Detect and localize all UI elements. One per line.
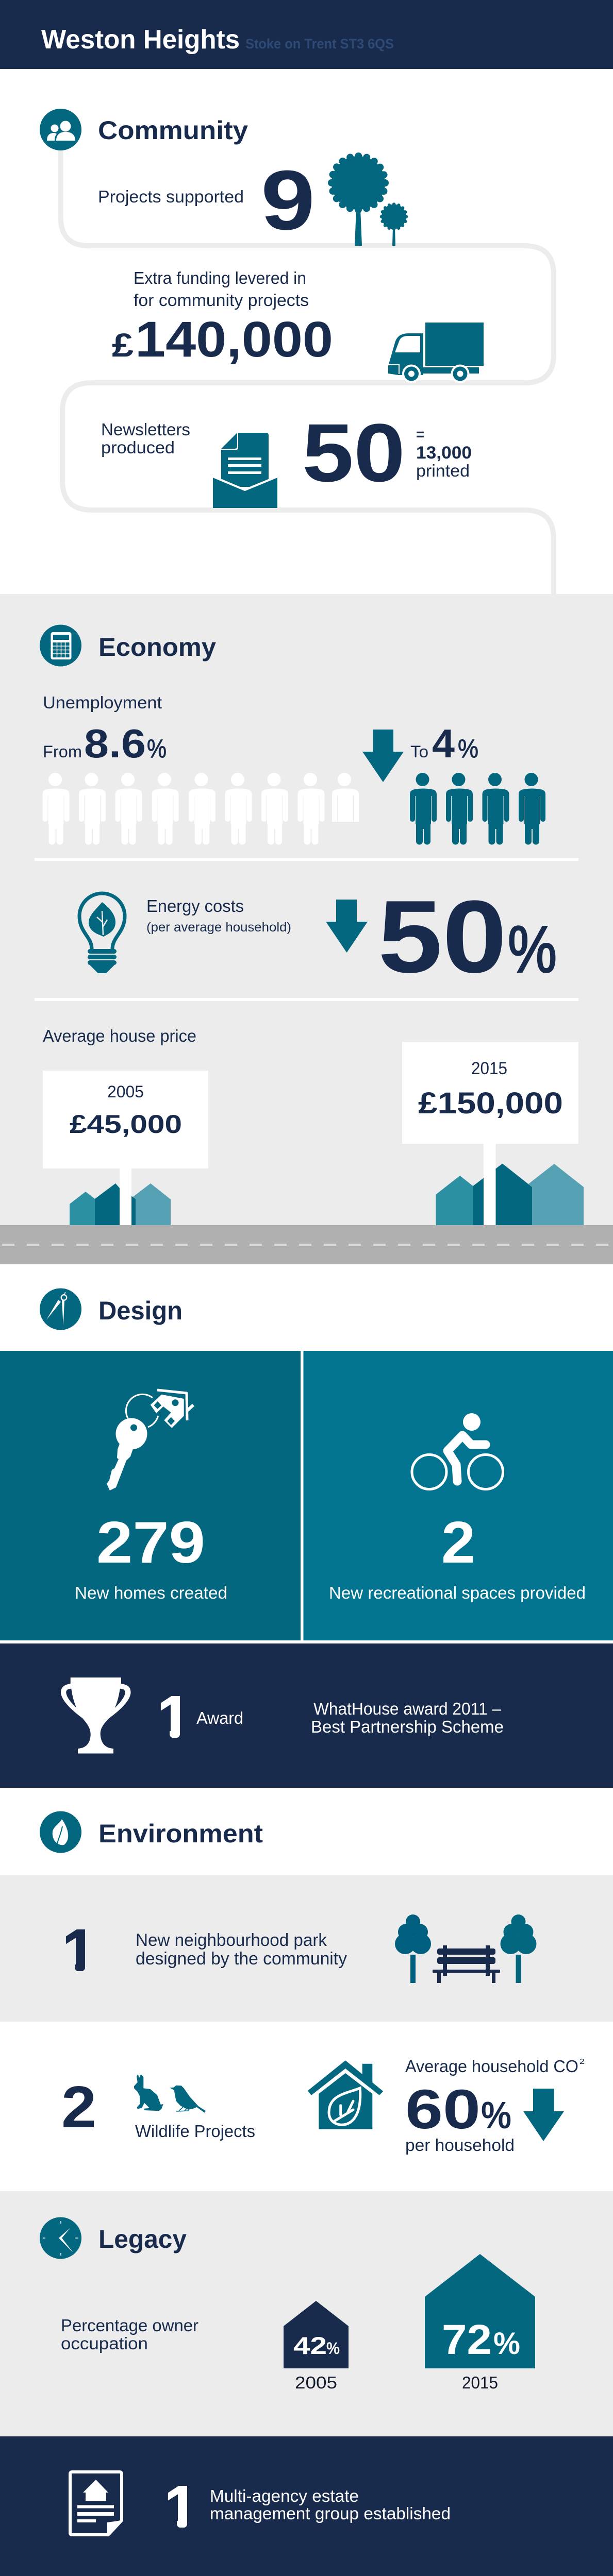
text: new neighbourhood park: designed by the community bbox=[136, 1949, 347, 1969]
text: percentage owner occupation bbox=[61, 2316, 198, 2353]
teal people: 4 bbox=[410, 773, 545, 845]
text: projects supported: Projects supported bbox=[98, 187, 244, 206]
stat: to 4%: To bbox=[410, 742, 428, 761]
year: 2005 bbox=[107, 1082, 144, 1101]
arrow: co2 down bbox=[523, 2089, 564, 2141]
sign: 2015 bbox=[402, 1042, 578, 1225]
text: unemployment: Unemployment bbox=[43, 693, 162, 712]
text: multi-agency group bbox=[210, 2486, 451, 2523]
white people: 8.6 bbox=[42, 773, 359, 845]
text: newsletters: produced bbox=[101, 438, 175, 457]
price: £45,000 bbox=[70, 1110, 182, 1139]
heading: legacy: Legacy bbox=[98, 2225, 187, 2253]
text: multi-agency group: Multi-agency estate bbox=[210, 2486, 359, 2505]
text: extra funding bbox=[134, 268, 309, 310]
text: extra funding: Extra funding levered in bbox=[134, 268, 306, 287]
number: 2: 2 bbox=[61, 2075, 96, 2140]
number: 1: 1 bbox=[62, 1917, 96, 1984]
stat: from 8.6%: 8.6 bbox=[84, 721, 146, 766]
icon: people bbox=[40, 109, 81, 150]
number: 1: 1 bbox=[164, 2473, 198, 2540]
icon: trees bbox=[332, 156, 406, 246]
text: extra funding: for community projects bbox=[134, 291, 309, 310]
arrow: unemployment down bbox=[362, 730, 404, 782]
text: percentage owner occupation: Percentage owner bbox=[61, 2316, 198, 2335]
text: 13,000 printed: printed bbox=[416, 461, 470, 480]
panel: legacy bbox=[0, 2191, 613, 2436]
text: award: Award bbox=[196, 1708, 243, 1727]
icon: right tree bbox=[500, 1914, 536, 1983]
icon: bird bbox=[170, 2086, 206, 2113]
text: newsletters: Newsletters bbox=[101, 420, 190, 439]
stat: 50% bbox=[378, 879, 557, 994]
stat: from 8.6%: % bbox=[147, 734, 167, 763]
stat: 60%: % bbox=[481, 2094, 511, 2137]
heading: environment: Environment bbox=[98, 1819, 263, 1848]
panel: recreational spaces bbox=[303, 1351, 613, 1640]
stat: 60%: 60 bbox=[405, 2078, 481, 2140]
address: Stoke on Trent ST3 6QS bbox=[245, 36, 394, 52]
number: 1: 1 bbox=[157, 1684, 191, 1751]
icon: light bulb bbox=[79, 893, 125, 973]
stat: from 8.6%: From bbox=[43, 742, 82, 761]
text: average house price: Average house price bbox=[43, 1026, 196, 1045]
houses: 2015 bbox=[436, 1163, 584, 1225]
icon: bench bbox=[433, 1945, 500, 1983]
text: new neighbourhood park bbox=[136, 1930, 347, 1969]
number: 279: 279 bbox=[96, 1510, 205, 1575]
icon: left tree bbox=[395, 1914, 431, 1983]
panel: economy bbox=[0, 594, 613, 1264]
panel: award bbox=[0, 1643, 613, 1788]
label: 2005: 2005 bbox=[295, 2373, 337, 2392]
text: energy costs: Energy costs bbox=[146, 896, 244, 916]
number: 140,000: 140,000 bbox=[135, 311, 333, 367]
panel: new homes bbox=[0, 1351, 301, 1640]
panel: estate management bbox=[0, 2436, 613, 2576]
icon: calculator bbox=[40, 624, 81, 667]
text: per household: per household bbox=[405, 2136, 515, 2155]
icon: eco house bbox=[308, 2060, 383, 2129]
heading: economy: Economy bbox=[98, 633, 216, 662]
number: 140,000: £ bbox=[112, 327, 134, 364]
year: 2015 bbox=[471, 1059, 507, 1078]
stat: 50%: % bbox=[508, 913, 557, 987]
heading: design: Design bbox=[98, 1296, 183, 1325]
text: new neighbourhood park: New neighbourhood park bbox=[136, 1930, 327, 1950]
text: 13,000 printed: = bbox=[416, 426, 424, 443]
icon: key and house bbox=[107, 1390, 193, 1490]
panel: environment bbox=[0, 1811, 613, 2155]
icon: compass bbox=[40, 1288, 81, 1330]
icon: truck bbox=[388, 323, 484, 383]
icon: newsletter envelope bbox=[213, 433, 277, 508]
text: new recreational spaces: New recreational spaces provided bbox=[329, 1583, 586, 1602]
house: 72% 2015: % bbox=[493, 2326, 520, 2361]
text: average household co2: 2 bbox=[579, 2057, 585, 2066]
house: 42% 2005: % bbox=[326, 2339, 340, 2358]
house: 42% 2005: 42 bbox=[293, 2332, 327, 2359]
title: Weston Heights bbox=[41, 25, 240, 55]
icon: cyclist bbox=[412, 1413, 503, 1489]
text: percentage owner occupation: occupation bbox=[61, 2334, 148, 2353]
text: 13,000 printed: 13,000 bbox=[416, 443, 472, 463]
road bbox=[0, 1225, 613, 1264]
stat: to 4%: 4 bbox=[432, 721, 455, 766]
heading: community: Community bbox=[98, 116, 248, 145]
text: whathouse award: Best Partnership Scheme bbox=[311, 1717, 504, 1736]
winding path bbox=[61, 149, 554, 598]
number: 50: 50 bbox=[302, 406, 405, 499]
text: whathouse award: WhatHouse award 2011 – bbox=[313, 1699, 502, 1718]
icon: clock bbox=[40, 2217, 81, 2259]
text: energy costs bbox=[146, 896, 291, 935]
panel: design bbox=[0, 1288, 613, 1788]
text: newsletters bbox=[101, 420, 190, 457]
icon: leaf bbox=[40, 1811, 81, 1853]
number: 9: 9 bbox=[261, 153, 315, 247]
stat: to 4% bbox=[410, 721, 478, 766]
house: 72% 2015 bbox=[425, 2254, 535, 2368]
house: 72% 2015: 72 bbox=[442, 2316, 492, 2363]
text: average household co2: Average household CO bbox=[405, 2057, 578, 2076]
text: 13,000 printed bbox=[416, 426, 472, 480]
houses: 2005 bbox=[70, 1183, 171, 1225]
text: new homes created: New homes created bbox=[75, 1583, 227, 1602]
header band bbox=[0, 0, 613, 69]
icon: trophy bbox=[61, 1677, 131, 1754]
arrow: energy down bbox=[326, 900, 368, 953]
house: 42% 2005 bbox=[284, 2301, 349, 2368]
panel: community bbox=[40, 109, 554, 598]
label: 2015: 2015 bbox=[462, 2373, 498, 2392]
number: 2: 2 bbox=[441, 1510, 475, 1575]
panel: neighbourhood park bbox=[0, 1875, 613, 2022]
icon: document bbox=[70, 2472, 122, 2535]
stat: to 4%: % bbox=[458, 734, 478, 763]
stat: from 8.6% bbox=[43, 721, 167, 766]
stat: 60% bbox=[405, 2078, 511, 2140]
price: £150,000 bbox=[418, 1087, 563, 1120]
icon: rabbit bbox=[134, 2074, 163, 2111]
text: multi-agency group: management group established bbox=[210, 2504, 451, 2523]
sign: 2005 bbox=[43, 1071, 208, 1225]
stat: 50%: 50 bbox=[378, 879, 507, 994]
text: whathouse award bbox=[311, 1699, 504, 1736]
text: wildlife projects: Wildlife Projects bbox=[135, 2122, 255, 2141]
text: energy costs: (per average household) bbox=[146, 920, 291, 935]
